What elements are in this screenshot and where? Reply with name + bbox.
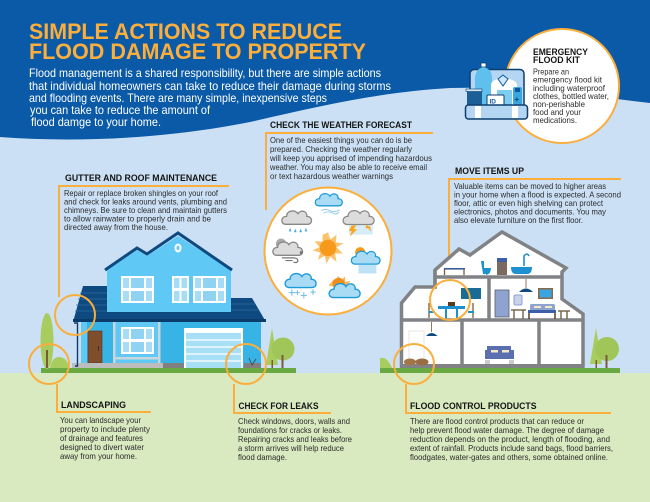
icon: grey windy cloud <box>273 239 303 263</box>
callout circle: roof <box>55 295 95 335</box>
intro text: Flood management is a shared responsibility, but there are simple actions <box>29 66 381 80</box>
emergency text: emergency flood kit <box>533 74 603 84</box>
ground <box>0 373 650 502</box>
gutter text: Repair or replace broken shingles on your roof <box>64 188 219 198</box>
upper windows <box>121 276 154 303</box>
nightstands <box>511 310 570 319</box>
title: SIMPLE ACTIONS TO REDUCE <box>29 19 342 44</box>
trees right of house <box>266 328 294 368</box>
porch <box>113 322 116 363</box>
weather text: prepared. Checking the weather regularly <box>270 144 413 154</box>
intro text: that individual homeowners can take to reduce their damage during storms <box>29 79 391 93</box>
wardrobe <box>495 290 509 317</box>
callout circle: leaks <box>226 344 266 384</box>
garage <box>184 328 243 368</box>
gutter text: directed away from the house. <box>64 222 168 232</box>
panel: emergency flood kit <box>505 29 619 143</box>
gutter heading: GUTTER AND ROOF MAINTENANCE <box>65 173 217 184</box>
landscaping text: You can landscape your <box>60 415 141 425</box>
leaks text: a storm arrives will help reduce <box>238 443 344 453</box>
move text: Valuable items can be moved to higher areas <box>454 181 606 191</box>
callout circle: landscaping <box>29 344 69 384</box>
icon: flood kit box: + <box>514 95 520 104</box>
title <box>29 19 366 64</box>
panel: gutter and roof maintenance <box>59 173 229 297</box>
attic vent <box>174 244 182 252</box>
leaks text: Repairing cracks and leaks before <box>238 434 352 444</box>
upper body <box>107 236 231 312</box>
bush by cutaway <box>380 358 392 368</box>
callout circle: flood products <box>394 344 434 384</box>
emergency text: Prepare an <box>533 66 569 76</box>
weather text: or text hazardous weather warnings <box>270 171 393 181</box>
leaks text: foundations for cracks or leaks. <box>238 425 342 435</box>
leaks text: flood damage. <box>238 452 287 462</box>
icon: sun behind cloud <box>329 275 360 298</box>
title: FLOOD DAMAGE TO PROPERTY <box>29 39 366 64</box>
weather text: One of the easiest things you can do is be <box>270 135 412 145</box>
callout circle: move items <box>430 280 470 320</box>
downspout <box>74 323 78 366</box>
door <box>88 331 102 363</box>
grass strip right <box>380 368 620 373</box>
lower roof <box>73 286 266 322</box>
landscaping heading: LANDSCAPING <box>61 400 126 411</box>
move heading: MOVE ITEMS UP <box>455 166 525 177</box>
emergency text: food and your <box>533 107 581 117</box>
sand bags <box>404 358 416 366</box>
gutter text: to allow rainwater to properly drain and be <box>64 214 211 224</box>
icon: blue cloud with wind <box>315 194 342 214</box>
door lower <box>409 331 424 361</box>
weather text: will keep you apprised of impending hazardous <box>269 153 432 163</box>
panel: move items up <box>449 166 621 280</box>
emergency text: clothes, bottled water, <box>533 91 609 101</box>
icon: sun with cloud and rain <box>351 247 380 273</box>
trees left <box>40 313 69 369</box>
lamp <box>525 279 527 288</box>
sofa <box>485 346 514 359</box>
cutaway house illustration <box>400 232 584 368</box>
emergency text: non-perishable <box>533 99 585 109</box>
panel: landscaping <box>57 384 151 461</box>
flood control text: help prevent flood water damage. The degree of damage <box>410 425 604 435</box>
lower body <box>81 320 261 368</box>
mirror <box>514 295 522 305</box>
gutter text <box>64 188 227 232</box>
icon: blue cloud with snow <box>285 274 316 299</box>
emergency text <box>533 66 609 125</box>
flood control text: floodgates, water-gates and others, some obtained online. <box>410 452 608 462</box>
weather icons circle <box>264 188 392 314</box>
emergency heading <box>533 47 589 66</box>
header wave <box>0 0 650 139</box>
house illustration <box>72 233 266 368</box>
landscaping text: property to include plenty <box>60 424 151 434</box>
gutter text: and check for leaks around vents, plumbing and <box>64 196 227 206</box>
intro text <box>29 66 391 129</box>
flood control text: There are flood control products that can reduce or <box>410 416 584 426</box>
panel: check for leaks <box>234 384 352 462</box>
bed <box>530 304 555 313</box>
weather heading: CHECK THE WEATHER FORECAST <box>270 120 412 131</box>
move text: electronics, photos and documents. You may <box>454 206 607 216</box>
dining table <box>429 302 474 319</box>
landscaping text: away from your home. <box>60 451 137 461</box>
leaks text <box>238 416 352 462</box>
move text <box>454 181 621 225</box>
shelf <box>497 262 507 275</box>
move text: also elevate furniture on the first floor. <box>454 215 583 225</box>
move text: floor, attic or even high shelving can protect <box>454 198 604 208</box>
gutter text: chimneys. Be sure to clean and maintain gutters <box>64 205 227 215</box>
lower window <box>121 327 154 354</box>
tv <box>461 288 481 299</box>
icon: sun <box>312 232 344 264</box>
leaks heading: CHECK FOR LEAKS <box>238 401 318 412</box>
intro text: and flooding events. There are many simple, inexpensive steps <box>29 91 327 105</box>
emergency heading: EMERGENCY <box>533 47 589 58</box>
grass strip left <box>41 368 296 373</box>
icon: flood kit box <box>466 63 528 119</box>
flood control heading: FLOOD CONTROL PRODUCTS <box>410 401 536 412</box>
leaks text: Check windows, doors, walls and <box>238 416 350 426</box>
flood control text <box>410 416 613 462</box>
panel: flood control products <box>406 384 613 462</box>
emergency text: including waterproof <box>533 83 606 93</box>
toilet <box>481 261 491 275</box>
attic furniture <box>444 269 464 275</box>
trees right of cutaway <box>590 328 619 368</box>
intro text: you can take to reduce the amount of <box>30 103 211 117</box>
picture <box>538 288 553 299</box>
panel: check the weather forecast <box>266 120 433 210</box>
emergency text: medications. <box>533 115 577 125</box>
weather text: weather. You may also be able to receive email <box>269 162 427 172</box>
flood control text: extent of rainfall. Products include sand bags, flood barriers, <box>410 443 613 453</box>
icon: flood kit box: ID <box>490 98 496 106</box>
flood control text: reduction depends on the product, length of flooding, and <box>410 434 610 444</box>
emergency heading: FLOOD KIT <box>533 55 580 66</box>
bathtub <box>511 267 532 274</box>
crack <box>249 358 256 365</box>
floors and walls <box>401 270 583 365</box>
upper roof <box>105 233 232 270</box>
landscaping text <box>60 415 151 461</box>
landscaping text: of drainage and features <box>60 433 143 443</box>
icon: storm cloud with lightning <box>343 211 374 236</box>
landscaping text: designed to divert water <box>60 442 144 452</box>
move text: in your home when a flood is expected. A second <box>454 190 621 200</box>
icon: grey cloud with rain <box>282 211 312 232</box>
weather text <box>269 135 432 181</box>
foundation <box>163 363 184 368</box>
lamp lower <box>430 322 432 332</box>
intro text: flood damge to your home. <box>31 115 161 129</box>
